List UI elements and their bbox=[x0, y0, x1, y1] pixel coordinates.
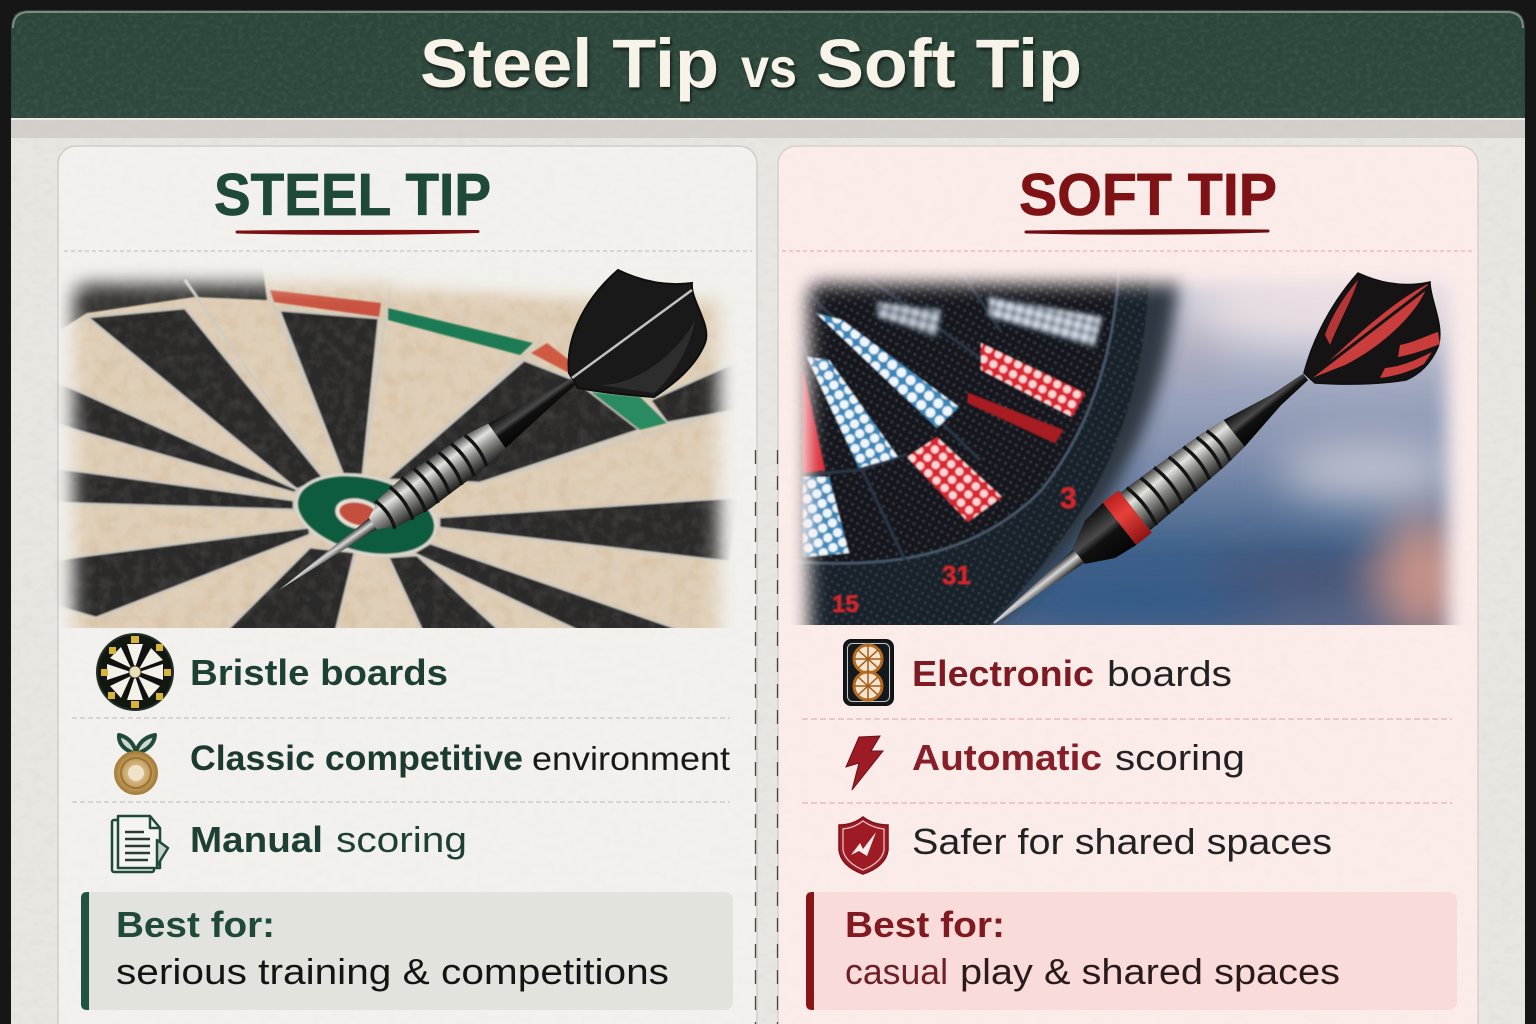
bull bbox=[294, 472, 438, 557]
board outer ring bbox=[790, 262, 1180, 630]
background glows bbox=[1004, 281, 1459, 625]
text: electronic boards bbox=[912, 653, 1232, 694]
LED segments bbox=[877, 297, 1102, 347]
callout: best for steel bbox=[81, 892, 733, 1010]
text: automatic scoring: scoring bbox=[1115, 737, 1245, 778]
dart: soft bbox=[977, 273, 1440, 644]
text: automatic scoring bbox=[912, 737, 1245, 778]
heading underline bbox=[1026, 231, 1268, 233]
paper-toned fade above the ring bbox=[392, 274, 724, 308]
red board numbers: 3 bbox=[1060, 482, 1077, 515]
heading: soft tip: SOFT TIP bbox=[1019, 162, 1277, 228]
title: Steel Tip bbox=[420, 25, 719, 102]
flight bbox=[1304, 273, 1440, 384]
text: manual scoring: Manual bbox=[190, 819, 323, 860]
icon: score document bbox=[112, 816, 168, 872]
callout: best for steel: Best for: bbox=[116, 904, 275, 945]
flight bbox=[569, 270, 706, 397]
header banner bbox=[11, 10, 1525, 120]
callout: best for soft: casual bbox=[845, 951, 948, 992]
text: manual scoring: scoring bbox=[336, 819, 467, 860]
red board numbers bbox=[832, 482, 1077, 618]
panel: steel tip bbox=[50, 146, 757, 1024]
heading: steel tip: STEEL TIP bbox=[214, 162, 491, 228]
title bbox=[420, 25, 1082, 102]
heading underline bbox=[237, 231, 478, 233]
text: classic competitive environment: environment bbox=[532, 740, 730, 777]
title: vs bbox=[741, 36, 797, 99]
callout: best for soft: Best for: bbox=[845, 904, 1005, 945]
dark board wedges bbox=[50, 258, 740, 637]
text: bristle boards: Bristle boards bbox=[190, 652, 448, 693]
icon: lightning bolt bbox=[846, 736, 883, 790]
photo: bristle board bbox=[50, 258, 740, 637]
icon: electronic board bbox=[844, 640, 893, 705]
text: classic competitive environment bbox=[190, 739, 730, 778]
text: electronic boards: boards bbox=[1107, 653, 1232, 694]
icon: dartboard bbox=[97, 634, 173, 710]
photo: electronic board bbox=[790, 262, 1475, 637]
callout: best for steel: serious training & competitions bbox=[116, 951, 669, 992]
red board numbers: 15 bbox=[832, 591, 859, 618]
red board numbers: 31 bbox=[942, 560, 971, 590]
doubles ring segments bbox=[270, 290, 667, 430]
icon: medal bbox=[115, 735, 157, 794]
dart: steel bbox=[267, 270, 706, 607]
icon: safety shield bbox=[839, 817, 888, 874]
title: Soft Tip bbox=[816, 25, 1082, 102]
board face bbox=[790, 262, 1150, 630]
text: classic competitive environment: Classic competitive bbox=[190, 739, 523, 778]
text: manual scoring bbox=[190, 819, 467, 860]
wire spider bbox=[185, 280, 720, 483]
panel: soft tip bbox=[778, 146, 1478, 1024]
text: safer for shared spaces: Safer for shared spaces bbox=[912, 821, 1332, 862]
text: electronic boards: Electronic bbox=[912, 653, 1094, 694]
text: automatic scoring: Automatic bbox=[912, 737, 1102, 778]
callout: best for soft: play & shared spaces bbox=[960, 951, 1340, 992]
callout: best for soft bbox=[806, 892, 1457, 1010]
